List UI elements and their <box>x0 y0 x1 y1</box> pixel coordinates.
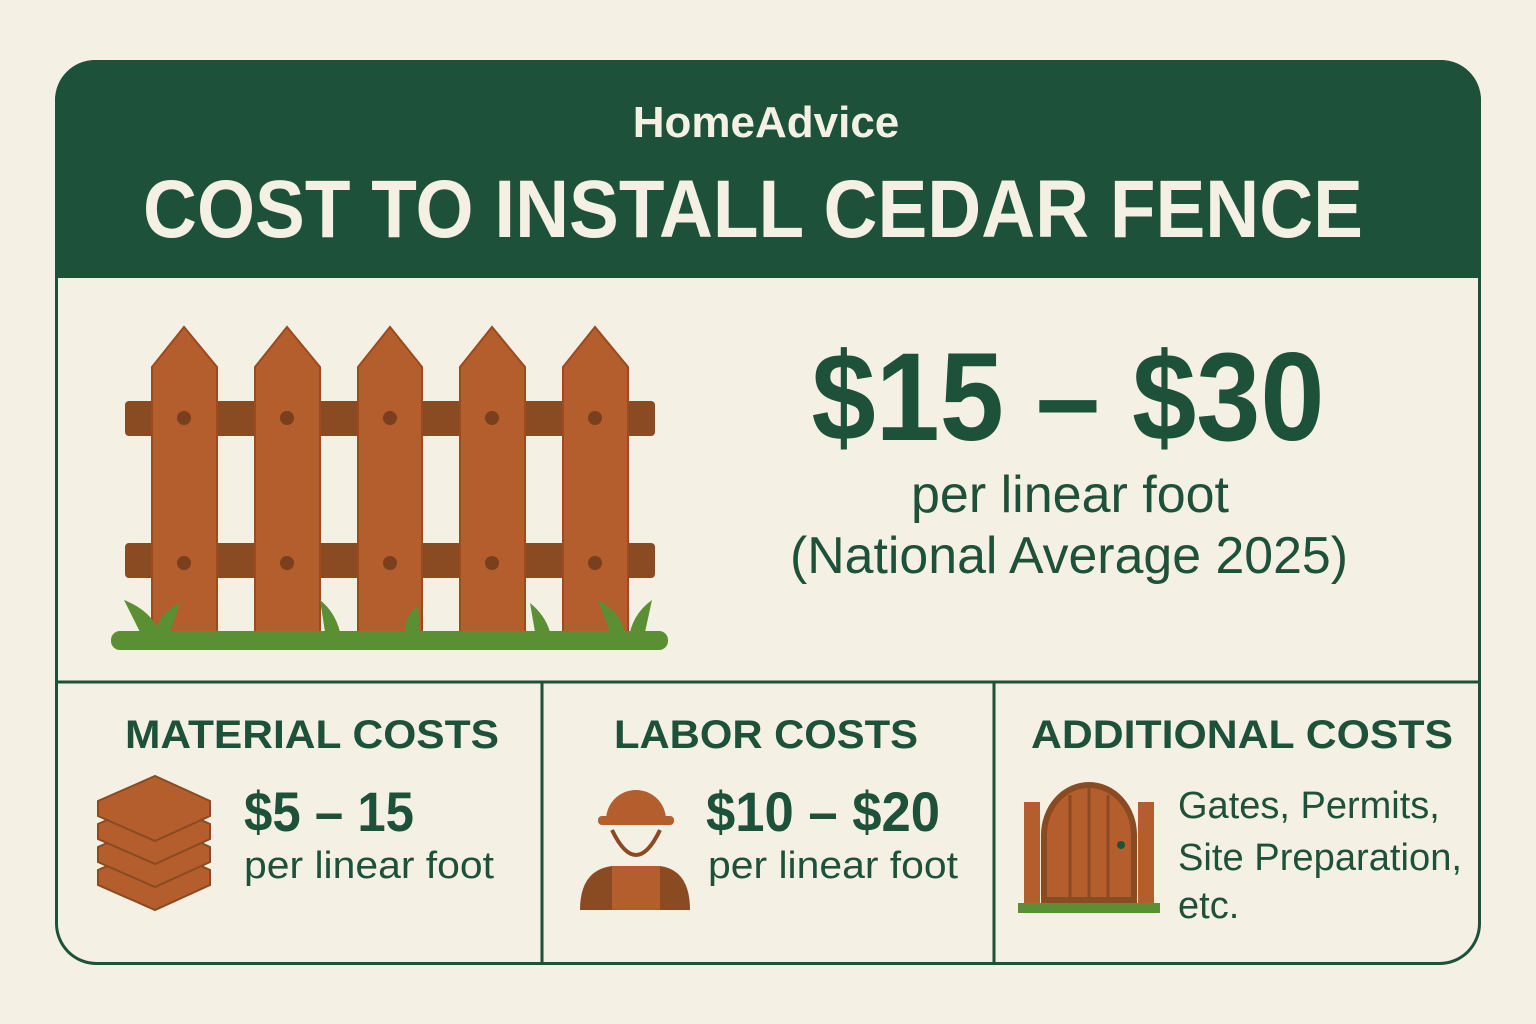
main price: $15 – $30 <box>812 328 1324 467</box>
price subtext <box>790 466 1348 585</box>
panel: material costs: $5 – 15 <box>244 780 414 843</box>
panel: additional costs: ADDITIONAL COSTS <box>1031 713 1453 757</box>
panel: labor costs: $10 – $20 <box>706 780 940 843</box>
panel: labor costs: LABOR COSTS <box>614 713 918 757</box>
panel: additional costs: Site Preparation, <box>1178 837 1462 879</box>
price subtext: per linear foot <box>911 466 1230 524</box>
icon: lumber stack <box>98 776 210 910</box>
icon: worker <box>580 790 690 910</box>
title: COST TO INSTALL CEDAR FENCE <box>143 164 1363 255</box>
panel: additional costs: etc. <box>1178 885 1239 927</box>
header brand: HomeAdvice <box>633 98 899 147</box>
panel: labor costs <box>580 713 958 910</box>
panel: additional costs: Gates, Permits, <box>1178 785 1440 827</box>
icon: gate <box>1018 785 1160 913</box>
panel: material costs <box>98 713 499 910</box>
illustration: picket fence <box>111 327 668 650</box>
panel: material costs: per linear foot <box>244 845 494 887</box>
price subtext: (National Average 2025) <box>790 527 1348 585</box>
panel: material costs: MATERIAL COSTS <box>125 713 499 757</box>
panel: additional costs <box>1018 713 1462 927</box>
panel: labor costs: per linear foot <box>708 845 958 887</box>
